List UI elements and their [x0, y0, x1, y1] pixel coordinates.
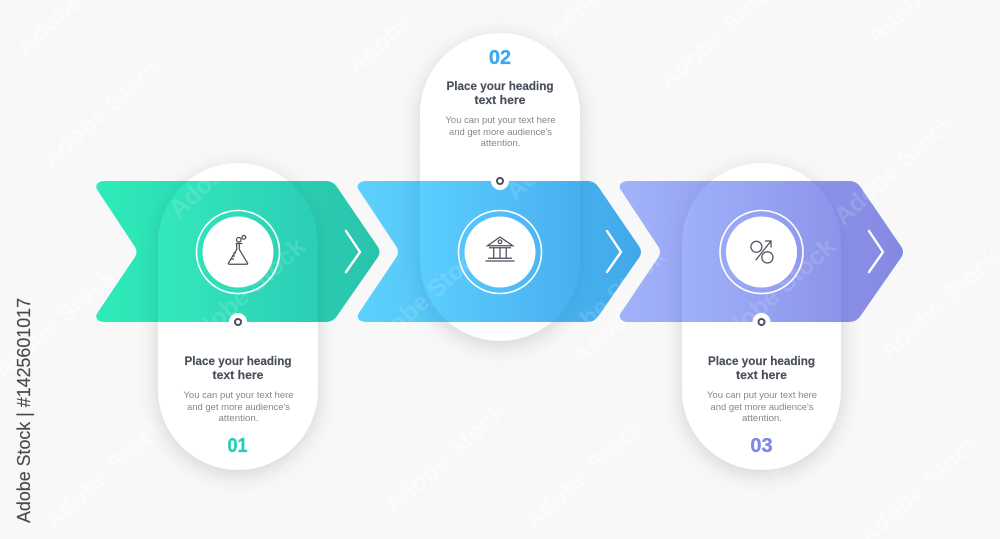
text: card 03: [707, 354, 817, 423]
icon: flask in ring: [196, 210, 280, 294]
background watermark pattern: Adobe Stock: [39, 412, 171, 536]
panel: card 01: [158, 163, 318, 475]
arrow: step 3: [620, 181, 903, 322]
watermark pattern: Adobe Stock: [359, 237, 491, 361]
side credit: Adobe Stock id: Adobe Stock | #1425601017: [13, 298, 34, 523]
number: 01: 01: [228, 435, 248, 457]
watermark pattern: Adobe Stock: [829, 107, 961, 231]
text: card 01: and get more audience's: [187, 401, 290, 412]
text: card 01: text here: [212, 368, 264, 382]
icon: bank in ring: [458, 210, 542, 294]
connector dot: card 01: [229, 313, 247, 331]
background watermark pattern: Adobe Stock: [519, 412, 651, 536]
text: card 03: and get more audience's: [710, 401, 814, 412]
text: card 03: text here: [736, 368, 787, 382]
text: card 02: You can put your text here: [446, 114, 556, 125]
text: card 02: Place your heading: [446, 79, 554, 93]
watermark pattern: Adobe Stock: [179, 232, 311, 356]
connector dot: card 03: [752, 313, 770, 331]
text: card 01: attention.: [218, 412, 258, 423]
watermark pattern: Adobe Stock: [709, 232, 841, 356]
arrow: step 2: [358, 181, 641, 322]
text: card 01: Place your heading: [184, 354, 292, 368]
watermark pattern: Adobe Stock: [164, 100, 296, 224]
watermark pattern: Adobe Stock: [719, 402, 851, 526]
text: card 02: [446, 79, 556, 148]
text: card 03: attention.: [742, 412, 782, 423]
number: 03: 03: [750, 435, 773, 457]
text: card 02: and get more audience's: [449, 126, 552, 137]
background watermark pattern: Adobe Stock: [829, 107, 961, 231]
text: card 02: attention.: [480, 137, 520, 148]
text: card 03: You can put your text here: [707, 389, 817, 400]
number: 02: 02: [489, 47, 511, 69]
watermark pattern: Adobe Stock: [501, 82, 633, 206]
watermark pattern: Adobe Stock: [704, 62, 836, 186]
background watermark pattern: Adobe: [341, 8, 418, 80]
background watermark pattern: Adobe Stock: [379, 397, 511, 521]
text: card 03: Place your heading: [708, 354, 815, 368]
arrow: step 1: [96, 181, 380, 322]
watermark pattern: Adobe Stock: [539, 242, 671, 366]
panel: card 03: [682, 163, 841, 475]
text: card 01: You can put your text here: [184, 389, 294, 400]
icon: percent with arrow in ring: [720, 210, 803, 294]
text: card 02: text here: [474, 93, 526, 107]
background watermark pattern: Adobe: [566, 298, 643, 370]
background watermark pattern: Adobe Stock: [37, 50, 169, 174]
watermark pattern: Adobe: [396, 108, 473, 180]
connector dot: card 02: [491, 172, 509, 190]
text: card 01: [184, 354, 294, 423]
panel: card 02: [420, 33, 580, 346]
